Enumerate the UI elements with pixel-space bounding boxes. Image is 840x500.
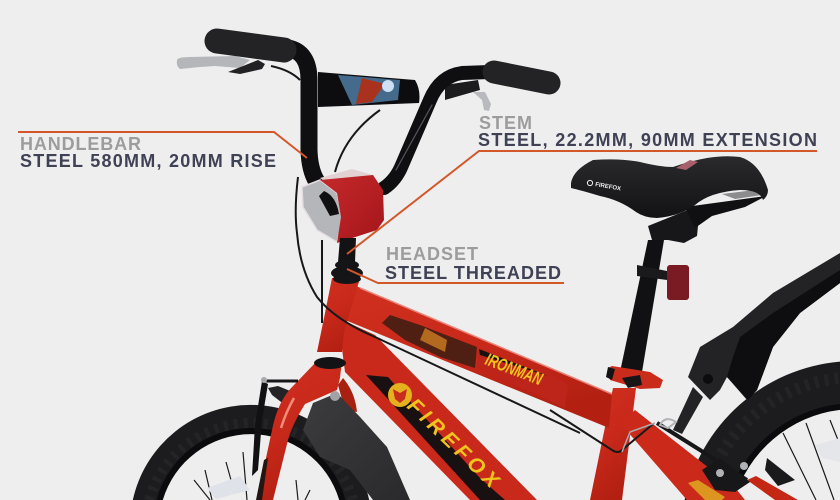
top tube decal [382, 315, 568, 408]
front brake [252, 377, 298, 476]
saddle: FIREFOX [595, 182, 621, 192]
right brake lever [445, 80, 491, 111]
rear fender [673, 253, 840, 434]
stem [338, 238, 356, 262]
seat post reflector [637, 265, 689, 300]
handlebar grips [217, 41, 549, 83]
rear wheel [685, 362, 840, 500]
handlebar crossbar pad [318, 72, 420, 107]
seat frame [648, 190, 766, 243]
rear stays and chainstay [620, 410, 798, 500]
down tube [338, 318, 537, 500]
down tube decal [366, 375, 505, 500]
top tube [345, 286, 612, 428]
callout: handlebar: STEEL 580MM, 20MM RISE [20, 151, 276, 171]
callout: handlebar: HANDLEBAR [20, 134, 141, 154]
head tube [317, 278, 360, 352]
callout: headset: HEADSET [386, 244, 478, 264]
front fork [256, 357, 357, 500]
left brake lever [177, 56, 265, 74]
seat post clamp [606, 366, 663, 389]
front fender [303, 391, 410, 500]
handlebar tube [288, 48, 490, 197]
seat tube [590, 388, 636, 500]
brake cables [271, 66, 580, 433]
saddle [571, 156, 768, 218]
seat post [620, 240, 664, 372]
callout: stem: STEEL, 22.2MM, 90MM EXTENSION [478, 130, 817, 150]
headset [331, 260, 363, 284]
callout: headset [347, 244, 564, 283]
top tube decal: IRONMAN [482, 350, 546, 390]
callout: handlebar [18, 132, 307, 171]
callout: stem [347, 113, 817, 254]
callout: stem: STEM [479, 113, 532, 133]
handlebar pad bag [302, 169, 384, 243]
front wheel [133, 405, 369, 500]
rear brake and cables [550, 410, 795, 492]
down tube decal: FIREFOX [403, 394, 505, 494]
callout: headset: STEEL THREADED [385, 263, 561, 283]
